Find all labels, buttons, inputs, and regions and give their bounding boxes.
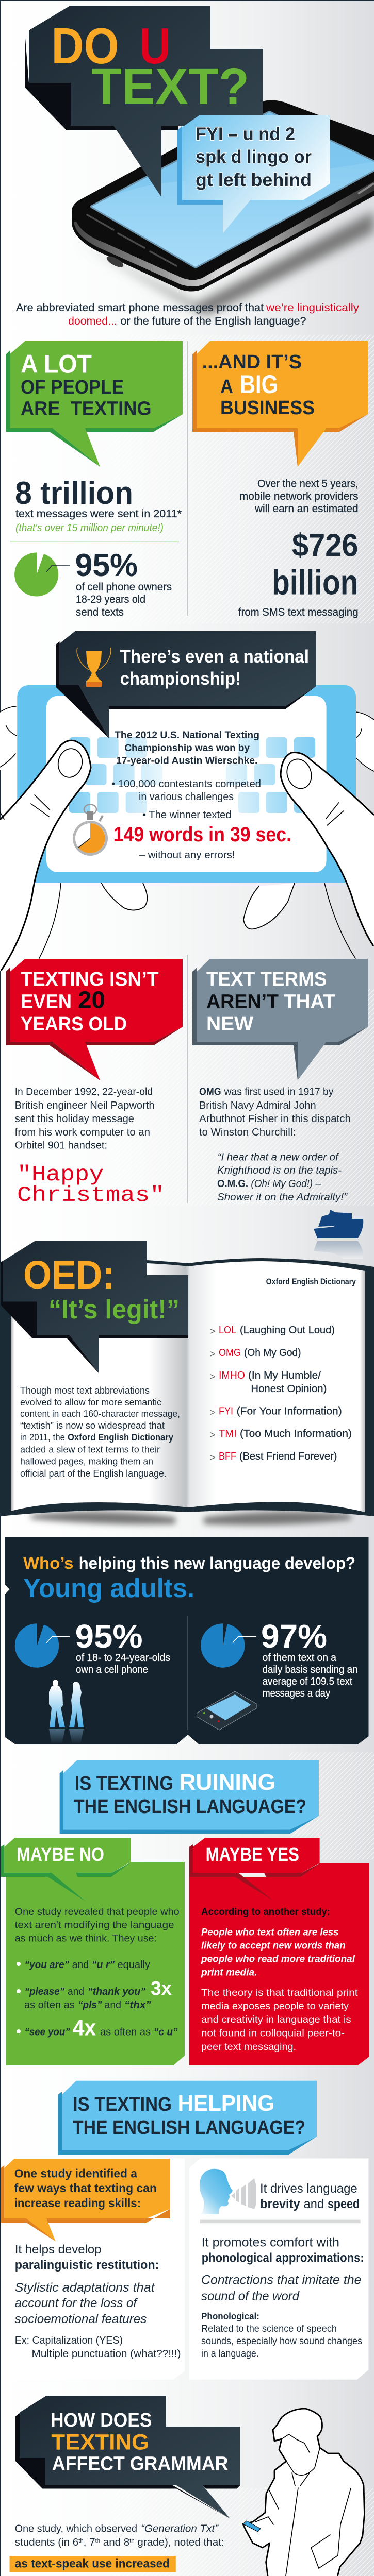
paralinguistic restitution text: It helps develop [15,2243,102,2257]
omg history text: was first used in 1917 by [224,1086,333,1097]
orange bubble [192,341,368,467]
oed bubble: OED: [23,1253,115,1297]
heading: is texting helping: THE ENGLISH LANGUAGE? [73,2117,305,2139]
phonological text: It promotes comfort with [202,2235,339,2249]
speech bubble: fyi [177,115,330,233]
bullet list: and [72,1959,89,1971]
stat: 97 percent: 97% [261,1618,327,1655]
neil papworth text: from his work computer to an [15,1127,150,1138]
grey bubble: AREN’T [206,991,279,1013]
happy christmas message: "Happy [17,1162,104,1187]
phonological text: sounds, especially how sound changes [201,2336,362,2347]
omg history text: to Winston Churchill: [199,1127,296,1138]
phonological text: Related to the science of speech [201,2324,337,2334]
happy christmas message: Christmas" [17,1183,165,1208]
bullet list: “please” [25,1986,64,1997]
title text: U [139,18,171,74]
churchill quote: O.M.G. [217,1178,248,1190]
abbreviation list: (Oh My God) [244,1347,301,1359]
section: national championship [0,631,374,971]
championship text: Championship was won by [124,743,250,754]
bullet list: “see you” [25,2027,70,2038]
panel: maybe yes [189,1838,369,2065]
study text: “Generation Txt” [141,2523,219,2535]
paralinguistic restitution text: Multiple punctuation (what??!!!) [32,2348,181,2360]
study text: and 8 [100,2537,129,2548]
paralinguistic restitution text: Ex: Capitalization (YES) [15,2335,123,2346]
neil papworth text: sent this holiday message [15,1113,134,1125]
book shadow [31,1512,351,1525]
abbreviation list: TMI [219,1428,237,1439]
oed bubble [1,1241,188,1374]
orange bubble: few ways that texting can [14,2181,157,2195]
intro question: or the future of the English language? [121,315,306,327]
open book pages [11,1261,365,1512]
bullet list: equally [118,1959,150,1971]
phone frame [17,685,356,883]
orange bubble: A [220,376,233,398]
study text: students (in 6 [15,2537,77,2548]
section: oed book [0,1241,374,1525]
championship text: 17-year-old Austin Wierschke. [116,756,257,767]
phonological text: in a language. [201,2348,259,2359]
highlight: text-speak increased: as text-speak use increased [15,2556,170,2570]
illustration: teen texting [243,2409,364,2576]
oed paragraph: in 2011, the [20,1432,65,1443]
abbreviation list: OMG [219,1347,241,1359]
neil papworth text [15,1086,155,1151]
orange bubble: increase reading skills: [14,2196,141,2210]
neil papworth text: In December 1992, 22-year-old [15,1086,153,1097]
intro question: doomed... [68,315,117,327]
stat: 97 percent: daily basis sending an [263,1664,358,1675]
abbreviation list: > [210,1349,216,1359]
study text: People who text often are less [201,1926,339,1938]
heading: is texting ruining: THE ENGLISH LANGUAGE? [74,1796,306,1818]
heading [23,1554,355,1603]
study text: peer text messaging. [201,2041,296,2053]
red bubble: EVEN [21,991,72,1013]
heading: helping this new language develop? [79,1554,355,1572]
clothing details [255,2434,351,2576]
phonological text: Phonological: [201,2311,259,2321]
panel: brevity and phonological [189,2159,368,2380]
section: grammar [9,2396,257,2576]
grammar bubble: TEXTING [51,2430,149,2455]
abbreviation list: IMHO [219,1370,245,1381]
panel: texting isn't even 20 [6,959,183,1208]
pie chart: 95 percent [15,1623,70,1668]
study text: not found in colloquial peer-to- [201,2028,345,2039]
churchill quote: “I hear that a new order of [218,1152,339,1163]
hands holding phone [0,706,374,771]
heading: is texting ruining: RUINING [180,1770,275,1795]
grey bubble: THAT [284,991,335,1013]
people silhouettes [49,1680,84,1744]
paralinguistic restitution text: paralinguistic restitution: [15,2258,159,2272]
championship text: The 2012 U.S. National Texting [115,730,259,741]
study text: th [95,2538,100,2544]
study text: The theory is that traditional print [201,1987,358,1998]
title text: DO [52,18,119,74]
abbreviation list: (Too Much Information) [240,1428,352,1439]
heading: is texting ruining: IS TEXTING [75,1773,173,1794]
stat: 726 billion [238,478,358,618]
bullet list: “you are” [25,1959,69,1971]
abbreviation list: > [210,1452,216,1463]
study text: likely to accept new words than [201,1940,346,1952]
vertical divider [187,955,188,1203]
churchill quote: Shower it on the Admiralty!” [217,1192,348,1203]
phonological text [201,2235,364,2359]
vertical divider [187,341,188,616]
panel: maybe no: MAYBE NO [17,1844,104,1866]
oed paragraph [20,1385,180,1479]
paralinguistic restitution text: socioemotional features [15,2312,147,2326]
green bubble: A LOT [21,349,92,378]
abbreviation list: > [210,1371,216,1382]
bullet list: 4x [73,2015,96,2041]
bullet list: “u r” [92,1959,115,1971]
study text: grade), noted that: [135,2537,224,2548]
panel: brevity and phonological: and [304,2197,324,2211]
paralinguistic restitution text: Stylistic adaptations that [15,2281,155,2295]
oed paragraph: Though most text abbreviations [20,1385,150,1396]
fyi text: FYI – u nd 2 [196,124,295,144]
oed paragraph: hallowed pages, making them an [20,1456,153,1466]
study text: and creativity in language that is [201,2014,351,2025]
pie chart: 95 percent [14,552,70,596]
fyi text [196,124,312,190]
abbreviation list: > [210,1408,216,1418]
bullet list: “thank you” [88,1986,145,1997]
panel: brevity and phonological: It drives language [260,2181,357,2196]
stat: 726 billion: mobile network providers [239,490,358,502]
championship bubble: There’s even a national [120,647,309,667]
stat: 726 billion: Over the next 5 years, [257,478,358,490]
oed paragraph: Oxford English Dictionary [68,1432,173,1443]
bullet list: 3x [151,1978,172,1999]
grey bubble: NEW [206,1013,253,1035]
study text: text aren't modifying the language [15,1920,174,1931]
championship bubble: championship! [120,669,241,689]
bubble shadow [1,1844,131,1902]
panel: reading skills [1,2159,185,2380]
green bubble: OF PEOPLE [21,377,124,398]
bullet list: “pls” [78,1999,102,2011]
championship text: • The winner texted [142,809,231,821]
panel: big business [192,341,368,618]
right thumb and arm [243,753,374,958]
neil papworth text: Orbitel 901 handset: [15,1140,107,1151]
churchill quote: (Oh! My God!) – [251,1178,321,1190]
happy christmas message [17,1162,165,1208]
intro question [16,302,360,327]
championship text: in various challenges [139,791,234,803]
phone keyboard keys [69,737,315,813]
stat: 95 percent: of 18- to 24-year-olds [76,1652,170,1664]
red bubble [6,959,183,1080]
churchill quote: Knighthood is on the tapis- [217,1165,342,1176]
championship text: 149 words in 39 sec. [113,823,291,846]
study text: people who read more traditional [201,1954,355,1965]
study text: media exposes people to variety [201,2001,349,2012]
bullet list: “c u” [154,2027,177,2038]
stat: 726 billion: from SMS text messaging [238,606,358,618]
heading: Who’s [23,1554,73,1572]
study text [15,1907,180,1944]
red bubble: TEXTING ISN’T [21,969,159,990]
heading: is texting helping [58,2081,317,2155]
icon: small phone [197,1691,256,1730]
grammar bubble: HOW DOES [51,2410,152,2431]
icon: stopwatch [73,805,108,856]
panel: maybe yes: MAYBE YES [206,1844,299,1866]
stat: 8 trillion: text messages were sent in 2011* [15,508,182,520]
icon: trophy [77,648,111,687]
bullet list: as often as [24,1999,75,2011]
stat: 95 percent: own a cell phone [76,1664,148,1675]
fyi text: gt left behind [196,170,312,190]
study text: , 7 [84,2537,95,2548]
heading: Young adults. [23,1573,194,1603]
red bubble: 20 [78,986,105,1013]
phonological text: Contractions that imitate the [201,2273,361,2287]
phone illustration [72,100,374,315]
phone in hand [243,2521,261,2532]
grammar bubble: AFFECT GRAMMAR [52,2453,229,2475]
bullet list: as often as [100,2027,151,2038]
study text: One study revealed that people who [15,1907,180,1918]
panel: maybe no [1,1838,185,2065]
panel: brevity and phonological: speed [328,2197,360,2211]
stat: 95 percent [75,1618,170,1675]
stat: 8 trillion [15,476,182,534]
left thumb and arm [0,740,147,971]
stat: 8 trillion: 8 trillion [15,476,133,511]
intro question: Are abbreviated smart phone messages proof that [16,302,264,314]
icon: speaking head [200,2169,256,2214]
oed bubble: “It’s legit!” [48,1295,180,1325]
bubble shadow [189,1844,320,1901]
paralinguistic restitution text [15,2243,181,2360]
stat: 726 billion: billion [272,563,358,602]
speech bubble: do u text [25,6,263,197]
phonological text: sound of the word [201,2289,300,2303]
stat: 95 percent: 95% [75,548,138,583]
pie chart: 97 percent [201,1623,256,1668]
abbreviation list: (In My Humble/ [248,1370,321,1381]
study text: According to another study: [201,1907,330,1918]
bullet list: and [68,1986,84,1997]
orange bubble [1,2159,170,2241]
study text [15,2523,224,2548]
neil papworth text: British engineer Neil Papworth [15,1100,155,1111]
panel: text terms aren't that new [192,959,368,1259]
abbreviation list: LOL [219,1325,236,1336]
grammar bubble [15,2396,240,2519]
panel: young adults [5,1537,368,1744]
championship text [111,730,291,861]
orange bubble: BIG [240,370,278,399]
orange bubble: One study identified a [14,2167,137,2180]
abbreviation list: > [210,1430,216,1440]
oed paragraph: added a slew of text terms to their [20,1445,160,1455]
stat: 97 percent: of them text on a [263,1652,337,1664]
heading: is texting helping: HELPING [177,2091,274,2116]
stat: 97 percent [261,1618,358,1699]
study text: th [78,2538,84,2544]
stat: 97 percent: messages a day [263,1688,330,1699]
stat: 95 percent: 18-29 years old [76,594,145,605]
stat: 8 trillion: (that's over 15 million per minute!) [15,522,164,534]
stat: 726 billion: will earn an estimated [254,503,358,515]
panel: brevity and phonological: brevity [260,2197,300,2211]
omg history text: British Navy Admiral John [199,1100,316,1111]
stat: 95 percent: send texts [76,606,124,618]
bullet list: “thx” [124,1999,151,2011]
red bubble: YEARS OLD [21,1013,127,1035]
abbreviation list [210,1325,352,1463]
bullet list [17,1959,177,2041]
paralinguistic restitution text: account for the loss of [15,2296,138,2310]
oed paragraph: official part of the English language. [20,1468,167,1479]
book cover [0,1258,374,1516]
bullet list: and [104,1999,121,2011]
stat: 95 percent: 95% [75,1618,142,1655]
panel: a lot of people are texting [6,341,183,618]
title text [52,18,249,115]
stat: 95 percent [75,548,172,618]
green bubble [6,341,183,467]
intro question: we’re linguistically [266,302,360,314]
championship text: – without any errors! [139,850,235,861]
omg history text [199,1086,351,1138]
fyi text: spk d lingo or [196,147,312,167]
icon: ship [314,1210,363,1259]
championship text: • 100,000 contestants competed [111,778,261,790]
abbreviation list: > [210,1326,216,1336]
grey bubble [192,959,368,1080]
grey bubble: TEXT TERMS [206,969,327,990]
churchill quote [217,1152,348,1203]
abbreviation list: (For Your Information) [237,1405,342,1417]
abbreviation list: (Laughing Out Loud) [240,1325,335,1336]
title text: TEXT? [91,58,249,115]
stat: 95 percent: of cell phone owners [76,581,172,593]
abbreviation list: Honest Opinion) [251,1383,327,1395]
stat: 97 percent: average of 109.5 text [263,1676,352,1687]
championship bubble [56,631,316,738]
omg history text: OMG [199,1086,221,1097]
orange bubble: BUSINESS [220,397,315,419]
study text: th [129,2538,135,2544]
abbreviation list: BFF [219,1451,236,1462]
green bubble: ARE TEXTING [21,398,152,420]
study text: as much as we think. They use: [15,1934,157,1944]
section: title and phone [25,6,374,315]
study text [201,1907,358,2053]
dictionary page header: Oxford English Dictionary [266,1277,356,1286]
abbreviation list: FYI [219,1405,233,1417]
heading: is texting ruining [60,1760,319,1834]
oed paragraph: “textish” is now so widespread that [20,1420,165,1431]
study text: print media. [201,1967,257,1978]
oed paragraph: content in each 160-character message, [20,1409,180,1419]
oed paragraph: evolved to allow for more semantic [20,1397,161,1408]
study text: One study, which observed [15,2523,137,2535]
orange bubble: ...AND IT’S [202,351,302,373]
heading: is texting helping: IS TEXTING [73,2094,172,2115]
stat: 726 billion: $726 [292,528,358,564]
abbreviation list: (Best Friend Forever) [239,1451,337,1462]
omg history text: Arbuthnot Fisher in this dispatch [199,1113,351,1125]
